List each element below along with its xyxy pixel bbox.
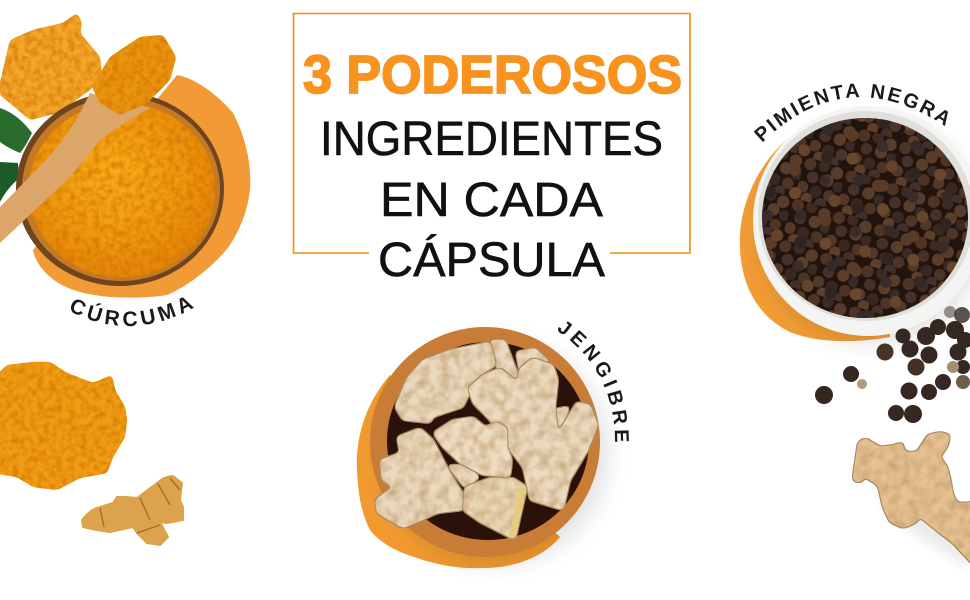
turmeric powder pile bottom left (0, 362, 127, 490)
title line: 3 poderosos: 3 PODEROSOS (303, 45, 682, 105)
turmeric powder pile top left (0, 13, 102, 120)
orange blob behind ginger bowl (357, 375, 560, 568)
label: Cúrcuma: CÚRCUMA (70, 297, 194, 326)
title (303, 45, 682, 287)
ginger root bottom right (853, 432, 970, 572)
turmeric root (82, 476, 183, 545)
label: Pimienta negra: PIMIENTA NEGRA (754, 84, 948, 142)
scattered peppercorns (815, 306, 970, 423)
wooden spoon with turmeric (0, 35, 176, 243)
bowl of turmeric (16, 92, 224, 286)
orange blob behind pepper bowl (740, 130, 890, 341)
title line: en cada: EN CADA (380, 174, 603, 227)
icon: green leaves (0, 108, 32, 202)
bowl of black pepper (753, 106, 970, 342)
bowl of ginger (370, 327, 607, 564)
orange blob behind turmeric bowl (33, 75, 250, 298)
ginger pieces (375, 340, 598, 540)
title line: cápsula: CÁPSULA (378, 234, 605, 287)
label: Jengibre: JENGIBRE (558, 321, 629, 442)
title box frame (294, 14, 690, 253)
title line: ingredientes: INGREDIENTES (320, 113, 663, 166)
